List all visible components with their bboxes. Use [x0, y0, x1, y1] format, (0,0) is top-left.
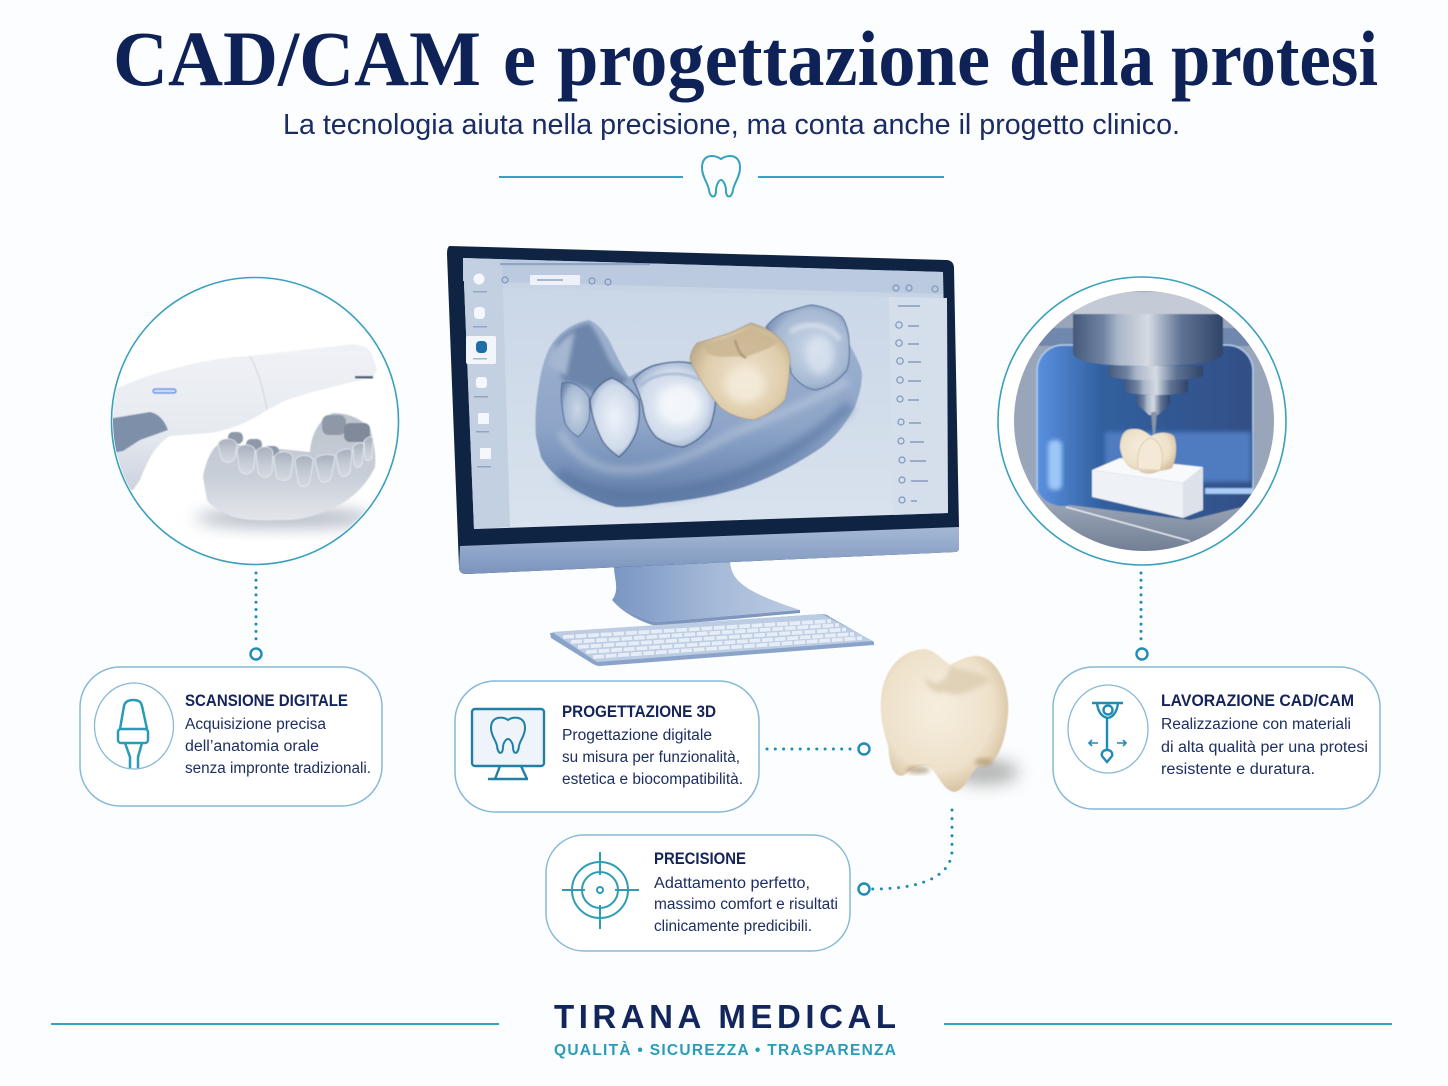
plaster dental model — [203, 413, 375, 520]
keyboard — [550, 614, 874, 666]
icon: monitor with tooth — [472, 709, 544, 779]
title: protesi — [1171, 15, 1378, 102]
machining chamber — [1037, 345, 1253, 535]
icon: target — [562, 852, 639, 929]
title: CAD/CAM — [113, 15, 481, 102]
premolar middle — [590, 378, 639, 457]
card: scansione digitale: dell’anatomia orale — [185, 738, 319, 755]
milled block — [1092, 458, 1203, 483]
scanner wand — [100, 344, 377, 490]
card: precisione — [546, 835, 850, 951]
icon: scanner — [94, 683, 174, 769]
dental CAD monitor — [447, 246, 959, 666]
monitor screen — [463, 258, 948, 529]
milled tooth — [1120, 429, 1176, 474]
card: progettazione 3D — [455, 681, 759, 812]
card: progettazione 3D: su misura per funzionalità, — [562, 749, 740, 766]
milling spindle — [1073, 292, 1223, 314]
monitor stand — [612, 562, 800, 626]
card: precisione: clinicamente predicibili. — [654, 918, 812, 935]
card: progettazione 3D: Progettazione digitale — [562, 727, 712, 744]
molar behind crown — [766, 305, 849, 390]
image circle: CAD/CAM milling machine — [998, 277, 1300, 565]
card: progettazione 3D: estetica e biocompatibilità. — [562, 771, 743, 788]
card: lavorazione CAD/CAM — [1053, 667, 1380, 809]
card: precisione: PRECISIONE — [654, 850, 746, 868]
title: e — [503, 15, 536, 102]
card: scansione digitale: Acquisizione precisa — [185, 716, 326, 733]
connector: design card to crown — [767, 744, 870, 754]
card: lavorazione CAD/CAM: resistente e duratura. — [1161, 761, 1315, 778]
gum highlights — [560, 380, 848, 470]
card: scansione digitale: senza impronte tradizionali. — [185, 760, 371, 777]
title: della — [1009, 15, 1154, 102]
card: lavorazione CAD/CAM: Realizzazione con materiali — [1161, 716, 1351, 733]
premolar left — [561, 382, 590, 437]
header divider with tooth icon — [499, 156, 944, 197]
card: lavorazione CAD/CAM: LAVORAZIONE CAD/CAM — [1161, 692, 1354, 710]
molar left — [633, 362, 716, 447]
restored crown — [690, 323, 790, 420]
icon: milling tool — [1068, 685, 1148, 773]
brand name: TIRANA MEDICAL — [554, 998, 896, 1035]
title: progettazione — [557, 15, 990, 102]
card: precisione: massimo comfort e risultati — [654, 896, 838, 913]
card: lavorazione CAD/CAM: di alta qualità per una protesi — [1161, 739, 1368, 756]
title — [113, 15, 1378, 102]
footer rules — [51, 1023, 1392, 1025]
connector: crown to precision card — [858, 810, 952, 894]
connector: milling to card — [1136, 573, 1148, 660]
3D dental arch model — [535, 305, 862, 507]
connector: scanner to card — [250, 573, 262, 660]
subtitle: La tecnologia aiuta nella precisione, ma conta anche il progetto clinico. — [283, 109, 1180, 141]
porcelain crown tooth — [881, 649, 1019, 792]
machine floor — [1034, 489, 1242, 551]
card: scansione digitale — [80, 667, 382, 806]
card: scansione digitale: SCANSIONE DIGITALE — [185, 692, 348, 710]
card: progettazione 3D: PROGETTAZIONE 3D — [562, 703, 716, 721]
card: precisione: Adattamento perfetto, — [654, 875, 810, 892]
brand tagline: QUALITÀ • SICUREZZA • TRASPARENZA — [554, 1042, 896, 1059]
monitor body — [447, 246, 959, 574]
image circle: intraoral scanner and dental model — [100, 278, 398, 564]
